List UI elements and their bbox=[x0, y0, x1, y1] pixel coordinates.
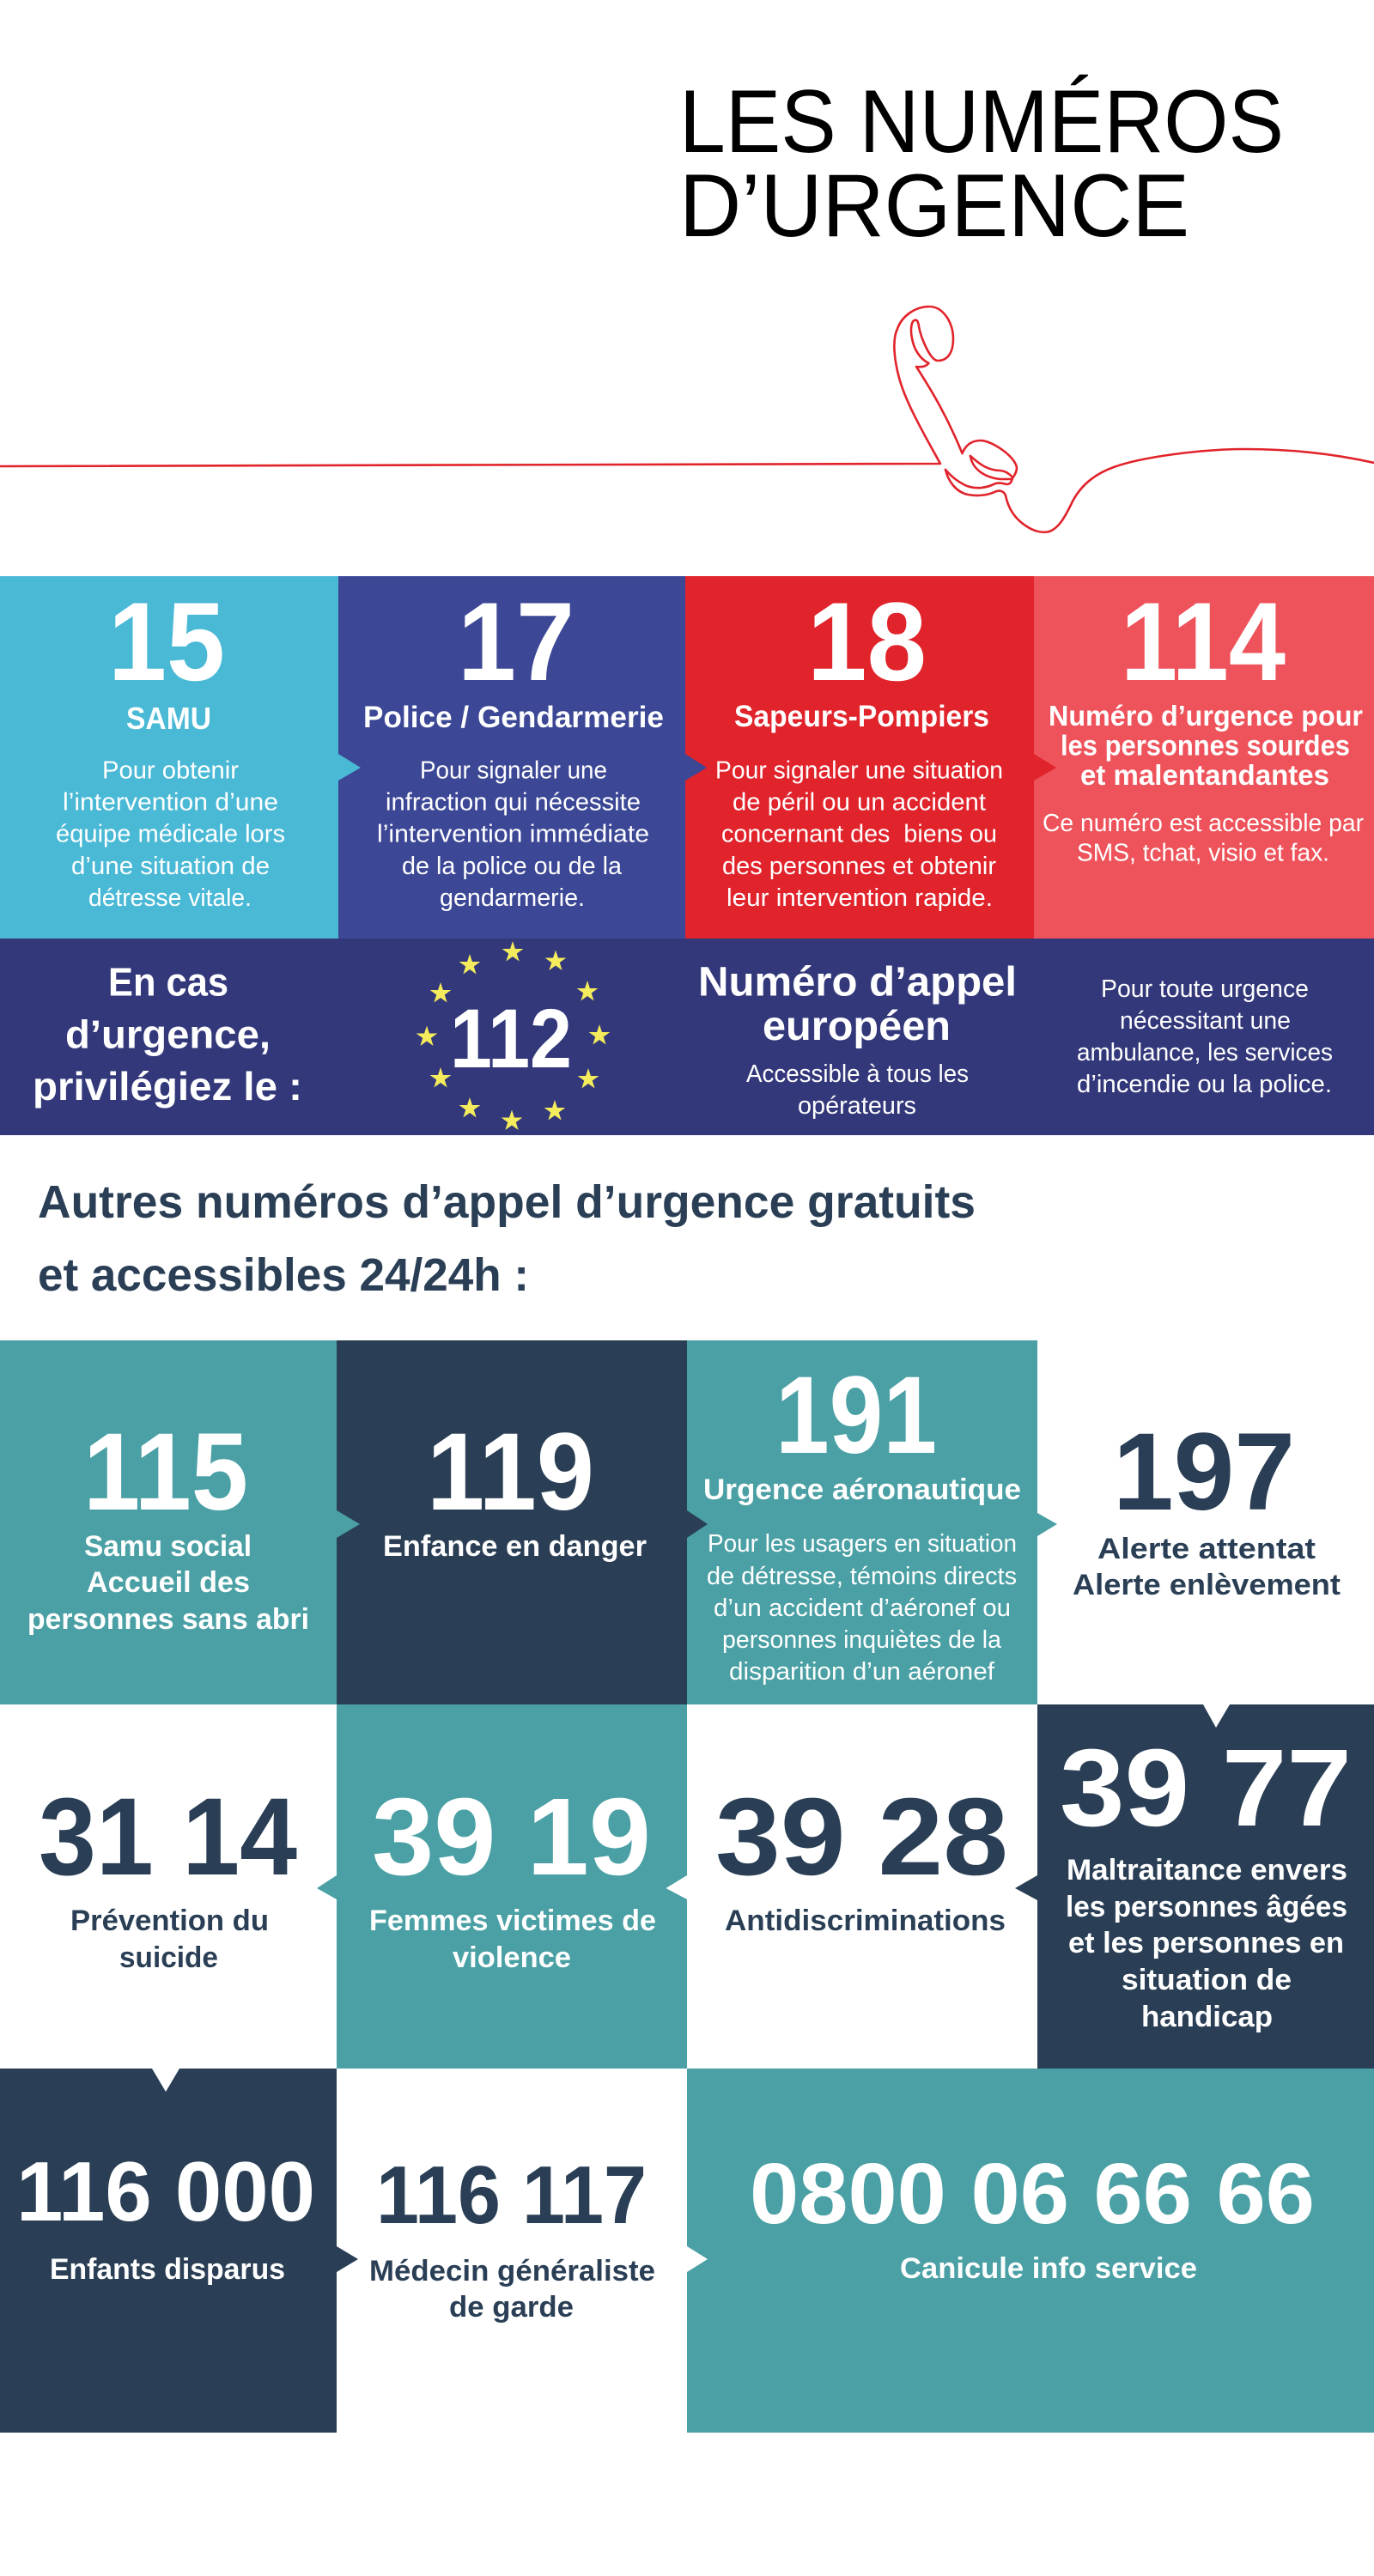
arrow: 39 19 to 31 14 bbox=[317, 1875, 337, 1899]
label: Samu social: personnes sans abri bbox=[27, 1603, 309, 1636]
label: Maltraitance envers les personnes âgées: situation de bbox=[1122, 1964, 1292, 1996]
arrow: 39 77 to 39 28 bbox=[1015, 1875, 1037, 1900]
arrow: 116 000 to 116 117 bbox=[337, 2246, 358, 2272]
number: 115: 115 bbox=[83, 1411, 248, 1534]
heading: en cas d'urgence, privilégiez le: d’urgence, bbox=[65, 1012, 271, 1056]
heading: autres numéros d'appel d'urgence: Autres numéros d’appel d’urgence gratuits bbox=[38, 1176, 976, 1228]
text: aéronautique description: disparition d’un aéronef bbox=[729, 1658, 995, 1686]
number: 197: 197 bbox=[1113, 1411, 1295, 1534]
number: 116 000: 116 000 bbox=[16, 2144, 315, 2239]
arrow: 15 to 17 bbox=[338, 754, 361, 781]
label: Femmes victimes de violence: violence bbox=[453, 1941, 571, 1974]
label: Prévention du suicide bbox=[70, 1905, 269, 1974]
number: 0800 06 66 66: 0800 06 66 66 bbox=[750, 2146, 1315, 2242]
text: accessible à tous les opérateurs bbox=[746, 1060, 969, 1120]
label: Enfance en danger: Enfance en danger bbox=[383, 1530, 647, 1563]
arrow: 17 to 18 bbox=[685, 754, 707, 781]
panel: 115 Samu social bbox=[0, 1340, 337, 1704]
title: D’URGENCE bbox=[679, 156, 1189, 256]
arrow: 116 117 to 0800 bbox=[687, 2246, 708, 2272]
text: SAMU description: Pour obtenir bbox=[102, 757, 239, 785]
text: police description: infraction qui nécessite bbox=[386, 788, 641, 816]
text: police description: l’intervention immédiate bbox=[377, 821, 649, 848]
text: pompiers description: Pour signaler une situation bbox=[715, 757, 1003, 785]
text: SAMU description: l’intervention d’une bbox=[63, 788, 278, 816]
label: Femmes victimes de violence bbox=[369, 1905, 656, 1974]
panel: 31 14 Prévention du suicide bbox=[0, 1704, 337, 2069]
heading: numéro d'appel européen bbox=[698, 960, 1017, 1049]
text: pour toute urgence: ambulance, les services bbox=[1077, 1039, 1333, 1066]
panel: 197 Alerte attentat bbox=[1037, 1340, 1374, 1704]
label: Prévention du suicide: Prévention du bbox=[70, 1905, 269, 1937]
text: police description: de la police ou de la bbox=[402, 853, 623, 880]
text: SAMU description bbox=[56, 757, 285, 912]
text: pompiers description: de péril ou un accident bbox=[733, 788, 986, 816]
panel: 39 77 Maltraitance bbox=[1037, 1704, 1374, 2069]
number: 116 117: 116 117 bbox=[376, 2149, 647, 2241]
heading: en cas d'urgence, privilégiez le: privilégiez le : bbox=[33, 1064, 302, 1109]
heading: Police / Gendarmerie: Police / Gendarmerie bbox=[363, 701, 664, 734]
label: Femmes victimes de violence: Femmes victimes de bbox=[369, 1905, 656, 1937]
heading: numéro d'appel européen: Numéro d’appel bbox=[698, 960, 1017, 1005]
label: Canicule info service: Canicule info service bbox=[900, 2252, 1197, 2285]
text: accessible à tous les opérateurs: Accessible à tous les bbox=[746, 1060, 969, 1088]
label: Urgence aéronautique: Urgence aéronautique bbox=[703, 1473, 1021, 1506]
label: Maltraitance envers les personnes âgées: les personnes âgées bbox=[1066, 1891, 1347, 1923]
heading: en cas d'urgence, privilégiez le: En cas bbox=[108, 960, 228, 1005]
text: pompiers description bbox=[715, 757, 1003, 912]
arrow: 191 to 197 bbox=[1037, 1513, 1057, 1536]
label: Antidiscriminations: Antidiscriminations bbox=[725, 1905, 1006, 1937]
label: Enfants disparus: Enfants disparus bbox=[50, 2253, 285, 2286]
arrow: 197 to 39 77 bbox=[1203, 1704, 1230, 1728]
icon: ring of European stars bbox=[416, 941, 610, 1130]
panel: 0800 06 66 66 Canicule info service bbox=[687, 2069, 1374, 2433]
number: 112: 112 bbox=[450, 992, 572, 1085]
number: 39 19: 39 19 bbox=[372, 1776, 651, 1899]
text: police description: gendarmerie. bbox=[440, 884, 585, 912]
text: 114 description: SMS, tchat, visio et fax. bbox=[1077, 840, 1329, 867]
text: aéronautique description: Pour les usagers en situation bbox=[708, 1530, 1017, 1558]
text: police description bbox=[377, 757, 649, 912]
heading: numéro d'urgence sourdes et malentendantes: et malentandantes bbox=[1080, 759, 1329, 791]
text: aéronautique description: personnes inquiètes de la bbox=[722, 1626, 1002, 1654]
arrow: 39 28 to 39 19 bbox=[666, 1875, 687, 1899]
number: 31 14: 31 14 bbox=[39, 1776, 297, 1899]
text: SAMU description: détresse vitale. bbox=[88, 884, 252, 912]
label: Médecin généraliste de garde: de garde bbox=[449, 2291, 574, 2324]
text: accessible à tous les opérateurs: opérateurs bbox=[798, 1092, 916, 1120]
label: Maltraitance envers les personnes âgées: Maltraitance envers bbox=[1067, 1854, 1347, 1886]
panel: 116 117 Médecin généraliste de garde bbox=[337, 2069, 687, 2433]
panel: 114 personnes sourdes bbox=[1034, 576, 1374, 939]
number: 17: 17 bbox=[458, 579, 575, 704]
label: Alerte attentat, alerte enlèvement: Alerte enlèvement bbox=[1073, 1569, 1341, 1601]
label: Prévention du suicide: suicide bbox=[119, 1941, 218, 1974]
text: pour toute urgence: nécessitant une bbox=[1120, 1007, 1291, 1035]
panel: 112 european number band bbox=[0, 939, 1374, 1135]
panel: 119 Enfance en danger bbox=[337, 1340, 687, 1704]
text: pour toute urgence: d’incendie ou la police. bbox=[1077, 1071, 1332, 1098]
label: Maltraitance envers les personnes âgées: et les personnes en bbox=[1068, 1927, 1344, 1959]
number: 39 77: 39 77 bbox=[1060, 1727, 1352, 1850]
number: 119: 119 bbox=[427, 1411, 594, 1534]
panel: 17 Police / Gendarmerie bbox=[338, 576, 685, 939]
arrow: 18 to 114 bbox=[1034, 754, 1056, 781]
arrow: 115 to 119 bbox=[337, 1510, 360, 1538]
label: Samu social: Accueil des bbox=[87, 1566, 250, 1599]
icon: red telephone handset with cord line bbox=[0, 307, 1374, 532]
text: aéronautique description: de détresse, témoins directs bbox=[707, 1563, 1017, 1590]
panel: 191 Urgence aéronautique bbox=[687, 1340, 1037, 1704]
heading: numéro d'urgence sourdes et malentendantes bbox=[1049, 700, 1363, 791]
text: SAMU description: équipe médicale lors bbox=[56, 821, 285, 848]
heading: numéro d'appel européen: européen bbox=[763, 1004, 951, 1049]
panel: 39 28 Antidiscriminations bbox=[687, 1704, 1037, 2069]
text: pour toute urgence bbox=[1077, 975, 1333, 1098]
label: Médecin généraliste de garde: Médecin généraliste bbox=[369, 2255, 655, 2287]
number: 39 28: 39 28 bbox=[715, 1776, 1008, 1899]
text: 114 description: Ce numéro est accessible par bbox=[1043, 810, 1364, 837]
text: pour toute urgence: Pour toute urgence bbox=[1101, 975, 1309, 1003]
heading: numéro d'urgence sourdes et malentendantes: Numéro d’urgence pour bbox=[1049, 700, 1363, 732]
arrow: 31 14 to 116 000 bbox=[152, 2069, 179, 2092]
heading: Sapeurs-Pompiers: Sapeurs-Pompiers bbox=[734, 700, 989, 733]
label: Alerte attentat, alerte enlèvement: Alerte attentat bbox=[1097, 1533, 1316, 1565]
number: 114: 114 bbox=[1121, 579, 1286, 704]
number: 15: 15 bbox=[108, 579, 225, 704]
title: LES NUMÉROS bbox=[679, 72, 1284, 172]
heading: autres numéros d'appel d'urgence: et accessibles 24/24h : bbox=[38, 1249, 529, 1301]
number: 191: 191 bbox=[775, 1354, 937, 1477]
text: pompiers description: leur intervention rapide. bbox=[727, 884, 993, 912]
text: SAMU description: d’une situation de bbox=[71, 853, 270, 880]
text: aéronautique description: d’un accident d’aéronef ou bbox=[714, 1595, 1011, 1622]
label: Samu social: Samu social bbox=[84, 1530, 252, 1563]
panel: 39 19 Femmes victimes de violence bbox=[337, 1704, 687, 2069]
label: Maltraitance envers les personnes âgées: handicap bbox=[1141, 2001, 1273, 2033]
heading: SAMU: SAMU bbox=[126, 701, 211, 736]
panel: 18 Sapeurs-Pompiers bbox=[685, 576, 1034, 939]
panel: 116 000 Enfants disparus bbox=[0, 2069, 337, 2433]
text: aéronautique description bbox=[707, 1530, 1017, 1686]
label: Maltraitance envers les personnes âgées bbox=[1066, 1854, 1347, 2033]
text: pompiers description: des personnes et obtenir bbox=[722, 853, 996, 880]
text: pompiers description: concernant des biens ou bbox=[721, 821, 997, 848]
panel: 15 SAMU bbox=[0, 576, 338, 939]
heading: autres numéros d'appel d'urgence bbox=[38, 1176, 976, 1301]
arrow: 119 to 191 bbox=[687, 1510, 708, 1538]
label: Médecin généraliste de garde bbox=[369, 2255, 655, 2324]
heading: numéro d'urgence sourdes et malentendantes: les personnes sourdes bbox=[1061, 730, 1350, 761]
title bbox=[679, 72, 1284, 256]
label: Alerte attentat, alerte enlèvement bbox=[1073, 1533, 1341, 1601]
text: 114 description bbox=[1043, 810, 1364, 867]
heading: en cas d'urgence, privilégiez le bbox=[33, 960, 302, 1109]
number: 18: 18 bbox=[807, 579, 927, 704]
text: police description: Pour signaler une bbox=[420, 757, 607, 785]
label: Samu social bbox=[27, 1530, 309, 1636]
